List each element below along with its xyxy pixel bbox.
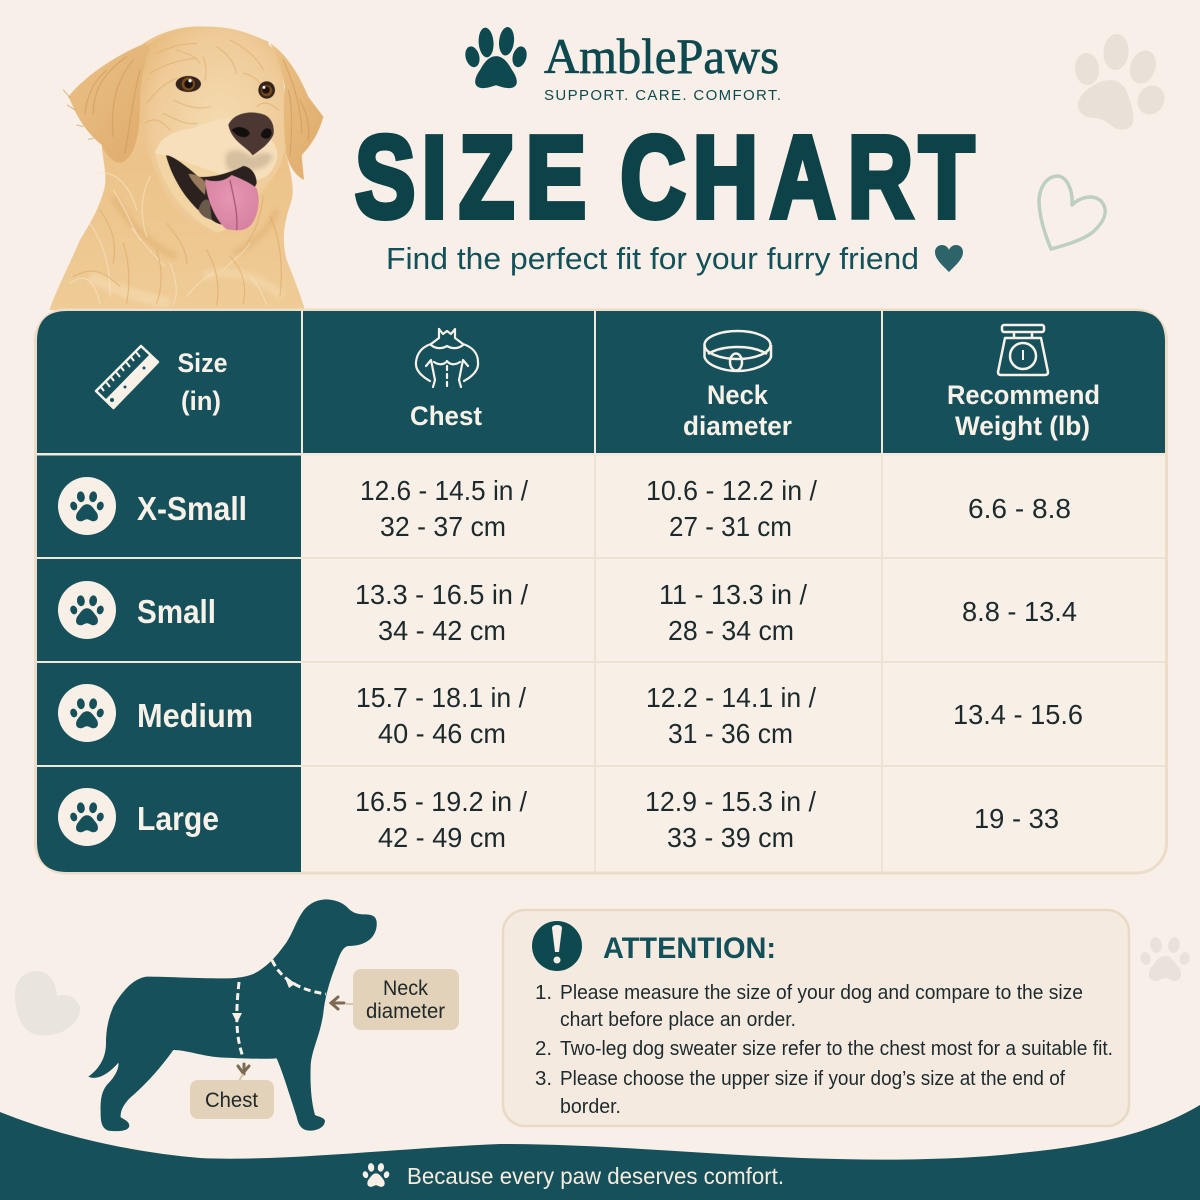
logo paw icon [463,26,529,88]
weight value: 13.4 - 15.6 [953,699,1083,730]
chest value [360,475,528,542]
chest value [356,682,526,749]
table frame [36,310,1166,873]
label: recommend: Recommend [947,380,1100,410]
dog right ear [270,43,323,180]
label: diameter: diameter [683,411,792,441]
chest value: 12.6 - 14.5 in / [360,475,528,506]
attention item 3: 3. [535,1067,552,1090]
neck measurement dashes [272,960,326,994]
label: chest: Chest [410,401,482,431]
chest measurement dashes [237,982,243,1057]
footer tagline: Because every paw deserves comfort. [407,1163,784,1189]
dog forehead fur strokes [145,40,278,130]
attention item 1: 1. [535,981,552,1004]
icon: heart [935,245,963,272]
chest value: 15.7 - 18.1 in / [356,682,526,713]
neck label: Neck [383,977,428,1000]
decorative paw right [1139,936,1191,981]
chest value: 16.5 - 19.2 in / [355,786,527,817]
chest value [355,786,527,853]
neck label: diameter [366,1000,445,1023]
chest label arrow [238,1064,249,1074]
neck value: 12.9 - 15.3 in / [645,786,816,817]
attention item 3: border. [560,1095,621,1118]
row label: X-Small [137,490,247,527]
decorative heart outline [1039,176,1105,249]
chest value [355,579,528,646]
neck value [645,786,816,853]
subtitle: Find the perfect fit for your furry friend [386,241,919,276]
row label: Large [137,800,219,837]
icon: ruler [96,346,158,408]
icon: paw badge [58,788,116,846]
icon: paw badge [58,684,116,742]
weight value: 8.8 - 13.4 [962,596,1077,627]
row label: Small [137,593,216,630]
neck value: 12.2 - 14.1 in / [646,682,816,713]
dog left ear fur strokes [63,57,140,153]
chest value: 42 - 49 cm [378,822,506,853]
logo [463,26,781,104]
chest value: 34 - 42 cm [378,615,506,646]
weight value: 19 - 33 [974,803,1059,834]
dog left ear [68,43,150,163]
decorative heart left [15,971,80,1036]
neck value: 10.6 - 12.2 in / [646,475,817,506]
chest label: Chest [205,1089,258,1112]
icon: paw badge [58,477,116,535]
table header band [37,311,1165,453]
footer paw icon [362,1163,390,1187]
neck label [353,969,459,1030]
title: SIZE CHART [355,113,974,243]
icon: scale [998,325,1048,375]
row label: Medium [137,697,253,734]
attention heading: ATTENTION: [603,932,776,965]
dog teeth and lip [198,199,212,220]
label: size: Size [178,348,228,378]
chest measurement arrowhead [232,1013,242,1023]
neck value [646,475,817,542]
row: small [58,579,1077,646]
dog right ear fur strokes [283,60,309,157]
tagline: SUPPORT. CARE. COMFORT. [544,87,781,104]
dog inner mouth [188,174,206,195]
dog nose [228,112,274,155]
header cell: neck diameter [683,331,792,441]
dog body dark fur strokes [73,197,281,305]
dog nostrils [232,127,272,139]
chest value: 40 - 46 cm [378,718,506,749]
header cell: recommend weight [947,325,1100,441]
decorative paw top right [1074,33,1170,130]
chest value: 13.3 - 16.5 in / [355,579,528,610]
neck connector [346,1003,353,1005]
neck value [646,682,816,749]
chest value: 32 - 37 cm [380,511,506,542]
neck measurement arrowhead [285,978,296,988]
attention item 1: Please measure the size of your dog and compare to the size [560,981,1083,1004]
chest connector [239,1074,243,1081]
dog body fur strokes [70,173,267,305]
dog chest shading [90,197,283,303]
dog lower jaw [155,153,257,233]
label: neck: Neck [707,380,769,410]
attention item 2: Two-leg dog sweater size refer to the chest most for a suitable fit. [560,1037,1113,1060]
neck value: 28 - 34 cm [668,615,794,646]
dog head [140,27,286,232]
dog muzzle grey shading [226,150,273,173]
dog mouth [166,155,257,225]
icon: paw badge [58,581,116,639]
dog fur silhouette [49,26,305,310]
neck value [659,579,807,646]
attention item 2: 2. [535,1037,552,1060]
attention item 1 [535,981,1083,1031]
row: medium [58,682,1083,749]
neck value: 33 - 39 cm [667,822,794,853]
header cell: size [96,346,228,416]
neck value: 31 - 36 cm [668,718,793,749]
panel: attention [503,910,1129,1126]
neck value: 11 - 13.3 in / [659,579,807,610]
footer wave [0,1105,1200,1200]
dog silhouette [88,899,377,1131]
dog muzzle [155,119,277,182]
row: x-small [58,475,1071,542]
illustration: golden retriever [49,26,323,310]
attention item 3 [535,1067,1065,1118]
dog tongue centre line [230,180,237,230]
weight value: 6.6 - 8.8 [968,493,1071,524]
label: weight: Weight (lb) [955,411,1090,441]
attention item 1: chart before place an order. [560,1008,796,1031]
dog tongue [205,175,259,230]
diagram: dog silhouette with measurements [88,899,459,1131]
header cell: chest [410,329,482,431]
icon: collar [704,331,771,371]
dog right eye [258,81,275,99]
attention item 3: Please choose the upper size if your dog’s size at the end of [560,1067,1065,1090]
table left column cells [37,455,301,872]
brand name: AmblePaws [544,28,779,84]
icon: exclamation [532,921,582,971]
icon: torso [416,329,478,387]
row: large [58,786,1059,853]
panel: size table [36,310,1166,873]
neck value: 27 - 31 cm [669,511,792,542]
attention box [503,910,1129,1126]
chest label [190,1080,274,1119]
label: in: (in) [181,386,221,416]
neck label arrow [331,997,344,1009]
dog left eye [176,76,201,92]
